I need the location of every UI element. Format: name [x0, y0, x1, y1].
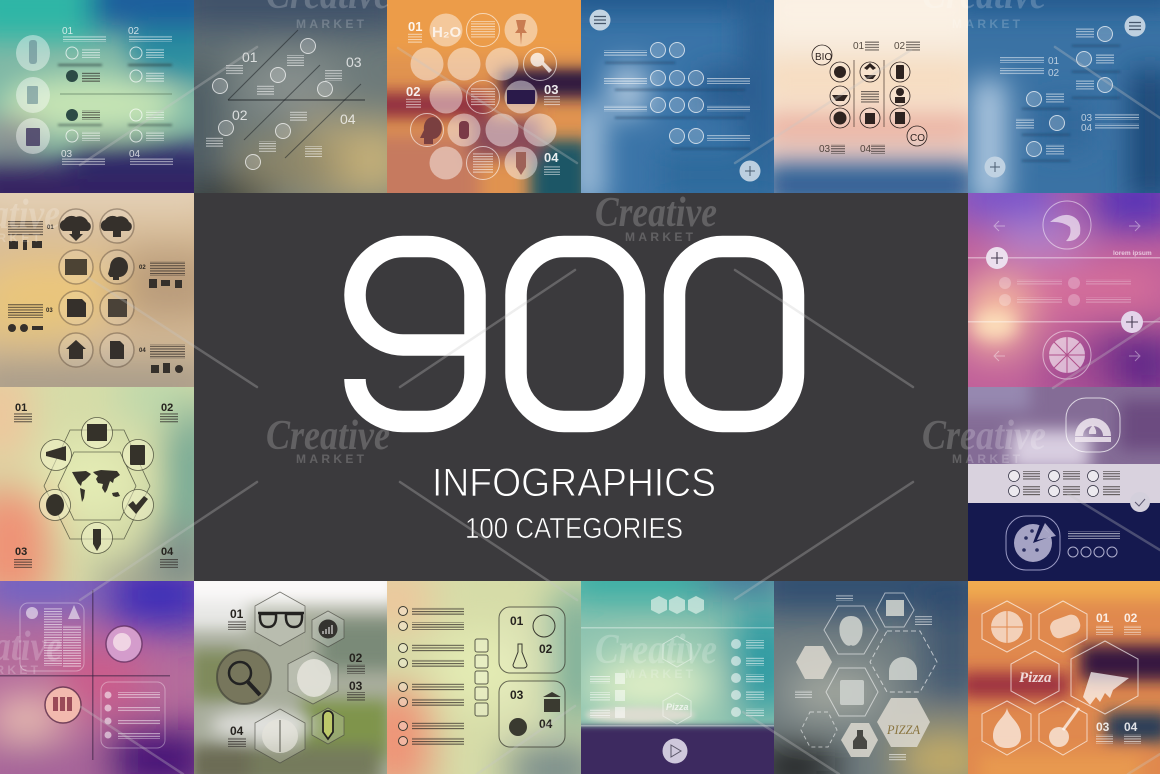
- Pizza label: Pizza: [666, 702, 689, 712]
- panel: green-salmon infographic with hexagon map: [0, 370, 220, 600]
- plus button upper: [986, 247, 1008, 269]
- number labels: 04: [544, 150, 559, 165]
- outlined circles: [410, 14, 556, 180]
- number labels: [232, 49, 362, 127]
- menu button: [590, 10, 610, 30]
- number labels: 02: [161, 402, 173, 414]
- watermark: Creative Market wordmarks: Creative: [595, 627, 717, 673]
- number labels: 02: [1048, 68, 1060, 79]
- panel: violet and navy pizza infographic with light band: [950, 370, 1160, 581]
- number labels: 02: [539, 642, 553, 656]
- hexagon frame and centre hexagon: [44, 430, 150, 539]
- panel: blue infographic with menu button: [581, 0, 774, 193]
- panel: teal infographic with play button: [560, 560, 795, 774]
- icon: salami: [1048, 612, 1083, 641]
- dashed oven hexagon: [870, 631, 937, 692]
- icon glyphs: [420, 20, 552, 175]
- list of icon rows: [398, 606, 464, 746]
- panel: teal and purple infographic with three circle icons: [0, 0, 194, 193]
- number labels: [230, 607, 363, 738]
- top hexagon icons: [651, 596, 704, 614]
- icon circles: [59, 209, 134, 367]
- digit 0 first: [516, 246, 634, 422]
- number labels: 04: [539, 717, 553, 731]
- card icons: [509, 615, 561, 736]
- icons: three large circles: [16, 35, 50, 154]
- icon: chart in dark circle: [318, 620, 338, 638]
- number labels: 02: [232, 107, 248, 123]
- number labels: 02: [128, 26, 140, 37]
- icon: pizza in circle: [1043, 331, 1091, 379]
- number labels: [510, 614, 553, 731]
- number labels: 02: [1124, 611, 1138, 625]
- number labels: 04: [1081, 123, 1093, 134]
- filled hexagons: [796, 646, 930, 757]
- right list icons and stripes: [731, 639, 764, 717]
- rounded card top: [499, 607, 565, 673]
- text stripes: [228, 620, 365, 747]
- number labels: 04: [139, 348, 146, 354]
- small circle icons: [1026, 26, 1112, 156]
- icon: test tubes button: [45, 687, 81, 723]
- watermark: Creative Market wordmarks: MARKET: [296, 17, 365, 31]
- PIZZA label: PIZZA: [886, 722, 920, 737]
- number labels: 02: [349, 651, 363, 665]
- left list stripes and icons: [590, 673, 625, 718]
- number labels: 03: [346, 54, 362, 70]
- panel: orange grid of translucent circles: [387, 0, 581, 193]
- menu button: [1124, 16, 1146, 36]
- big number 900: [355, 246, 794, 422]
- number labels: 04: [860, 144, 872, 155]
- watermark: Creative Market wordmarks: MARKET: [625, 667, 694, 681]
- BIO and CO2 labels: BIO: [815, 52, 832, 63]
- watermark: Creative Market wordmarks: [0, 0, 1046, 681]
- number labels: 01: [408, 19, 422, 34]
- H2O label: H₂O: [432, 24, 461, 41]
- filled circles: [410, 14, 556, 180]
- watermark: Creative Market wordmarks: MARKET: [952, 452, 1021, 466]
- lorem ipsum label: lorem ipsum: [1113, 250, 1152, 257]
- text stripes: [14, 413, 178, 568]
- check button: [1130, 492, 1150, 512]
- Pizza label: Pizza: [1019, 670, 1052, 686]
- number labels: 01: [47, 225, 54, 231]
- text stripes: [795, 594, 932, 761]
- number labels: 04: [1124, 720, 1138, 734]
- icon: ruler: [507, 90, 535, 104]
- watermark: Creative Market wordmarks: Creative: [595, 190, 717, 236]
- center panel: [194, 193, 968, 581]
- dashed box hexagon: [801, 712, 837, 747]
- navigation arrows: [994, 221, 1140, 361]
- number labels: 03: [510, 688, 524, 702]
- text stripes: [1096, 625, 1141, 744]
- panel: blurred photo with hexagon glasses and brain: [180, 565, 400, 774]
- panel: purple-pink infographic with shrimp and pizza: [950, 170, 1160, 400]
- lower text and ingredient icons: [1068, 531, 1120, 557]
- list rows: [999, 277, 1131, 306]
- number labels: 03: [1096, 720, 1110, 734]
- panel: blue infographic with menu and plus buttons: [968, 0, 1160, 193]
- dividers: [581, 627, 774, 726]
- icon: brain outline: [262, 719, 298, 753]
- icon: world map: [72, 470, 120, 502]
- tiny icons: [8, 240, 183, 373]
- plus button: [740, 160, 760, 182]
- icons: pepper, rolling pin, oven, tray, bottle: [839, 600, 917, 749]
- text stripes: [604, 50, 750, 141]
- small circle icons: [212, 38, 332, 170]
- dark glyphs: [46, 424, 148, 551]
- hexagons: [255, 592, 344, 763]
- text stripes: [8, 221, 185, 359]
- band icons and text: [1008, 470, 1120, 496]
- icon: pizza cutter: [1049, 708, 1079, 747]
- number labels: 03: [544, 82, 558, 97]
- icon: glasses: [258, 613, 304, 627]
- number labels: [1048, 56, 1093, 134]
- watermark: Creative Market wordmarks: Creative: [266, 413, 390, 459]
- number labels: 03: [819, 144, 831, 155]
- dark glyphs: [832, 63, 905, 124]
- panel: tan infographic with eight dark icon circles: [0, 193, 194, 387]
- number labels: 01: [15, 402, 27, 414]
- number labels: 03: [61, 149, 73, 160]
- number labels: 02: [139, 265, 146, 271]
- icon: shrimp in circle: [1043, 201, 1091, 249]
- light band: [968, 464, 1160, 503]
- BIO and CO2 labels: [815, 52, 925, 144]
- icon circles: [812, 45, 927, 146]
- number labels: 04: [340, 111, 356, 127]
- number labels: 01: [1048, 56, 1060, 67]
- text stripes: [62, 35, 173, 165]
- plus button: [984, 156, 1006, 178]
- number labels: 04: [129, 149, 141, 160]
- number labels: [46, 225, 146, 354]
- number labels: 03: [1081, 113, 1093, 124]
- icon: pizza: [991, 611, 1023, 643]
- number labels: [15, 402, 174, 558]
- text stripes: [831, 41, 920, 154]
- watermark: Creative Market wordmarks: Creative: [922, 413, 1046, 459]
- icon: pencil: [323, 711, 333, 739]
- icon: garlic: [993, 708, 1021, 748]
- panel: green-salmon infographic with lists and rounded cards: [360, 570, 600, 774]
- icon: oven badge: [1066, 398, 1120, 452]
- watermark: Creative Market wordmarks: MARKET: [952, 17, 1021, 31]
- number labels: 01: [62, 26, 74, 37]
- icon: brain: [297, 659, 331, 697]
- heading: INFOGRAPHICS: INFOGRAPHICS: [432, 461, 716, 505]
- central hexagons: [663, 636, 691, 724]
- digit 0 second: [674, 246, 794, 422]
- icon: pizza slice: [1083, 672, 1129, 705]
- number labels: [1096, 611, 1138, 734]
- number labels: [61, 26, 141, 160]
- rounded card bottom: [499, 681, 565, 747]
- subheading: 100 CATEGORIES: 100 CATEGORIES: [465, 513, 683, 545]
- number labels: 01: [230, 607, 244, 621]
- panel: slate to tan pizza hexagon infographic: [750, 560, 990, 774]
- text stripes: [44, 608, 160, 739]
- watermark: Creative Market wordmarks: MARKET: [296, 452, 365, 466]
- icon glyphs: bulb, pump, bin: [26, 40, 40, 146]
- small icons: [26, 605, 112, 738]
- text stripes: [406, 21, 560, 175]
- small circle icons: [650, 42, 704, 144]
- text stripes: [1000, 28, 1139, 155]
- number labels: 01: [853, 41, 865, 52]
- icon glyphs: clouds, money, head, disk, map, house, document: [60, 216, 132, 359]
- number labels: 03: [349, 679, 363, 693]
- number labels: 03: [15, 546, 27, 558]
- panel: purple and pink infographic with panels: [0, 560, 210, 774]
- play button: [662, 738, 688, 764]
- icon: bell button: [106, 626, 142, 662]
- panel: cream to blue infographic with dark circle icons: [774, 0, 968, 193]
- plus button lower: [1121, 311, 1143, 333]
- number labels: [819, 41, 906, 155]
- BIO and CO2 labels: CO: [910, 133, 925, 144]
- outlined hexagons: [982, 601, 1138, 755]
- watermark: Creative Market wordmarks: MARKET: [625, 230, 694, 244]
- text stripes: [206, 55, 342, 157]
- icon circles: [40, 418, 154, 554]
- number labels: 04: [230, 724, 244, 738]
- small circle icons: [66, 47, 142, 142]
- number labels: 02: [894, 41, 906, 52]
- central icon column: [475, 639, 488, 716]
- number labels: 01: [1096, 611, 1110, 625]
- icon: whole pizza badge: [1006, 516, 1060, 570]
- icon: magnifier button: [217, 650, 271, 704]
- number labels: [406, 19, 559, 165]
- number labels: 01: [510, 614, 524, 628]
- number labels: 04: [161, 546, 174, 558]
- outlined hexagons: pepper, rolling pin, tray: [824, 593, 914, 716]
- number labels: 01: [242, 49, 258, 65]
- panel: orange and dark pizza hexagon infographic: [950, 560, 1160, 774]
- number labels: 02: [406, 84, 420, 99]
- outlined text panels: [20, 603, 165, 748]
- panel: slate to tan infographic with diagonal slits: [194, 0, 387, 193]
- digit 9: [355, 246, 475, 422]
- number labels: 03: [46, 308, 53, 314]
